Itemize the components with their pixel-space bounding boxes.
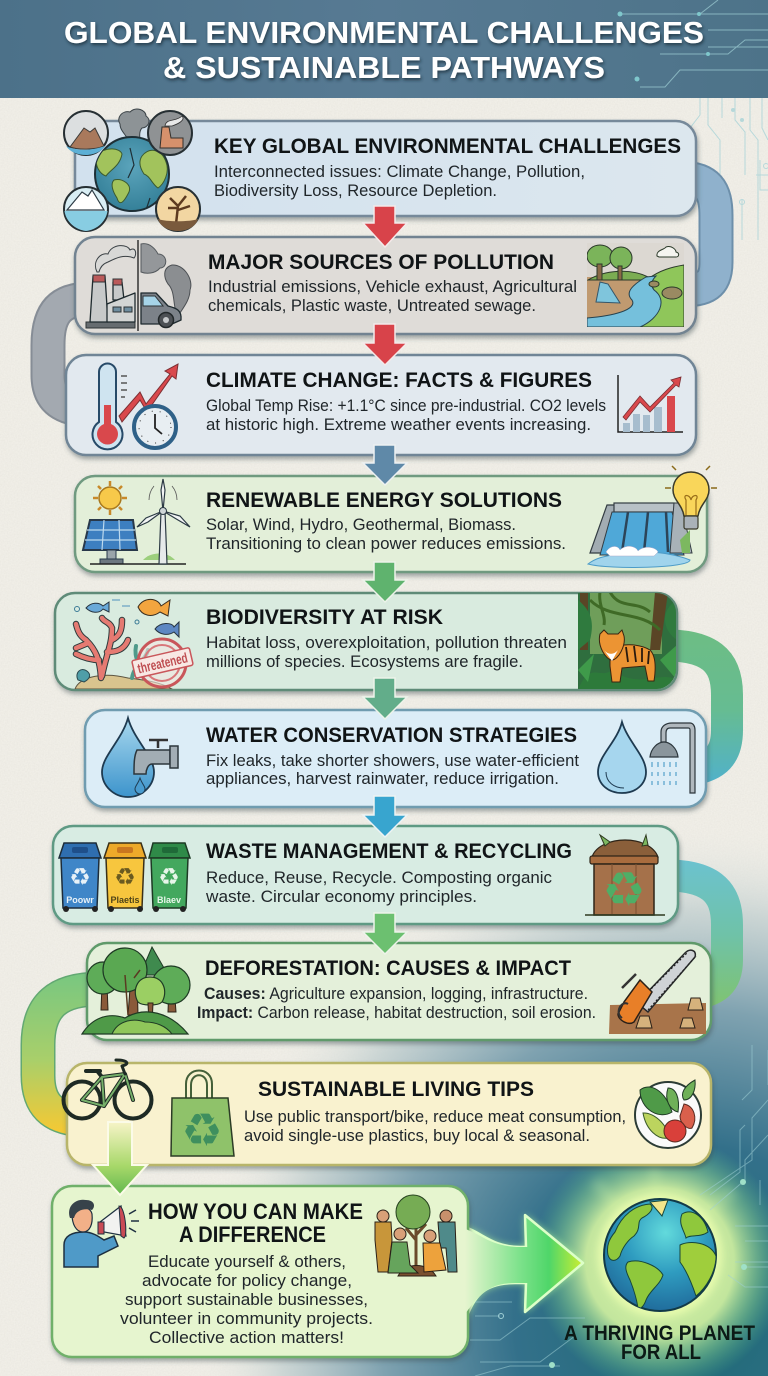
icon: sun, solar panel and wind turbine [83,479,190,564]
body text [206,516,566,553]
body text: chemicals, Plastic waste, Untreated sewage. [208,297,536,315]
heading: CLIMATE CHANGE: FACTS & FIGURES [206,369,592,392]
icon: reusable shopping bag: ♻ [181,1104,223,1156]
body text [214,163,585,200]
icon: coral reef, fish and threatened stamp: threatened [136,649,189,676]
icon: community planting a tree [375,1195,457,1276]
icon: rising bar chart [618,375,683,432]
body text: Collective action matters! [149,1329,344,1347]
icon: thermometer with clock [92,364,178,449]
body text: Educate yourself & others, [148,1253,346,1271]
body text: Causes: Agriculture expansion, logging, infrastructure. [204,985,588,1003]
panel: key global environmental challenges [64,109,696,231]
icon: earth with four threats [64,109,200,231]
connector: teal-green loop from panel 7 to panel 8 [660,875,727,994]
heading: SUSTAINABLE LIVING TIPS [258,1078,534,1101]
closing caption: FOR ALL [621,1341,701,1364]
heading: KEY GLOBAL ENVIRONMENTAL CHALLENGES [214,135,681,158]
heading [148,1199,363,1247]
body text: avoid single-use plastics, buy local & seasonal. [244,1127,590,1145]
connector: gray loop from panel 2 to panel 3 [48,299,90,410]
arrow: red 1 [363,206,407,247]
body text [120,1253,373,1347]
icon: bicycle [64,1060,152,1118]
body text [206,634,567,671]
body text [206,752,579,788]
icon: hydro dam and light bulb [588,466,717,567]
main title: & SUSTAINABLE PATHWAYS [163,50,605,85]
icon: chainsaw and stumps [609,950,706,1034]
heading: WATER CONSERVATION STRATEGIES [206,724,577,747]
panel box [66,355,696,455]
body text [205,869,552,906]
body text: appliances, harvest rainwater, reduce irrigation. [206,770,559,788]
panel: waste management and recycling [53,826,678,924]
heading: MAJOR SOURCES OF POLLUTION [208,251,554,274]
icon: three recycling bins [59,843,190,912]
connector: green-blue loop from panel 5 to panel 6 [660,645,727,770]
body text: Global Temp Rise: +1.1°C since pre-industrial. CO2 levels [206,397,606,415]
panel: biodiversity at risk [55,592,678,690]
panel: water conservation strategies [85,710,706,807]
circuit decoration: lower right [470,1045,768,1376]
body text: waste. Circular economy principles. [205,888,477,906]
panel box [52,1186,468,1357]
arrow: bright green [363,913,407,954]
panel box [67,1063,711,1165]
heading: WASTE MANAGEMENT & RECYCLING [206,840,572,863]
panel box [75,121,696,216]
panel box [85,710,706,807]
body text: Industrial emissions, Vehicle exhaust, Agricultural [208,278,577,296]
body text: Interconnected issues: Climate Change, Pollution, [214,163,585,181]
body text [197,985,596,1022]
connector: green-yellow loop fill [38,989,100,1120]
body text [208,278,577,315]
body text: Habitat loss, overexploitation, pollution threaten [206,634,567,652]
panel: how you can make a difference [52,1186,528,1357]
icon: forest [82,947,190,1034]
body text [244,1108,626,1145]
connector: green-yellow loop from panel 8 to panel 9 [38,989,100,1120]
heading: A DIFFERENCE [179,1222,326,1247]
icon: three recycling bins: Plaetis [110,895,140,905]
arrow: blue [363,796,407,837]
body text: Fix leaks, take shorter showers, use water-efficient [206,752,579,770]
body text: Use public transport/bike, reduce meat consumption, [244,1108,626,1126]
panel box [75,476,707,572]
body text: Impact: Carbon release, habitat destruction, soil erosion. [197,1004,596,1022]
panel: renewable energy solutions [75,466,717,572]
circuit decoration: upper right [690,98,768,240]
body text: at historic high. Extreme weather events increasing. [206,416,591,434]
panel neck to big arrow [462,1228,528,1318]
panel: major sources of pollution [75,237,696,334]
icon: person with megaphone [64,1200,139,1267]
icon: three recycling bins: ♻ [114,864,136,891]
icon: reusable shopping bag [171,1070,234,1156]
body text: Biodiversity Loss, Resource Depletion. [214,182,497,200]
heading: RENEWABLE ENERGY SOLUTIONS [206,489,562,512]
connector: blue loop from panel 1 to panel 2 [680,178,716,290]
icon: three recycling bins: Blaev [157,895,181,905]
icon: salad plate [635,1080,701,1148]
body text: volunteer in community projects. [120,1310,373,1328]
header banner [0,0,768,98]
icon: factory and car smoke [86,240,191,331]
panel box [55,593,677,690]
arrow: green [363,562,407,602]
body text: millions of species. Ecosystems are fragile. [206,653,523,671]
body text: Solar, Wind, Hydro, Geothermal, Biomass. [206,516,516,534]
panel box [87,943,711,1040]
icon: three recycling bins: ♻ [158,864,180,891]
connector: blue loop fill [680,178,716,290]
icon: compost bin [585,835,665,917]
body text: Transitioning to clean power reduces emissions. [206,535,566,553]
panel: climate change facts and figures [66,355,696,455]
icon: water drop and shower [598,722,695,793]
icon: polluted river landscape [587,243,684,327]
panel: deforestation causes and impact [82,943,711,1040]
arrow: slate blue [363,445,407,485]
icon: tiger in the jungle [578,592,678,690]
body text [206,397,606,434]
closing caption [564,1322,755,1364]
panel: sustainable living tips [64,1060,711,1165]
connector: gray loop fill [48,299,90,410]
heading: BIODIVERSITY AT RISK [206,606,443,629]
icon: three recycling bins: ♻ [69,864,91,891]
arrow: red 2 [363,324,407,365]
main title: GLOBAL ENVIRONMENTAL CHALLENGES [64,15,704,50]
body text: advocate for policy change, [142,1272,352,1290]
big arrow to planet [455,1215,583,1320]
body text: Reduce, Reuse, Recycle. Composting organic [206,869,552,887]
icon: compost bin: ♻ [602,864,646,917]
icon: water drop and faucet [102,718,178,797]
arrow: large green arrow from tips to action panel [93,1122,147,1195]
icon: thriving planet earth [598,1193,722,1317]
arrow: sea green [363,678,407,719]
panel box [53,826,678,924]
icon: three recycling bins: Poowr [66,895,94,905]
icon: coral reef, fish and threatened stamp [74,599,193,689]
heading: HOW YOU CAN MAKE [148,1199,363,1224]
panel box [75,237,696,334]
body text: support sustainable businesses, [125,1291,368,1309]
main title [64,15,704,85]
heading: DEFORESTATION: CAUSES & IMPACT [205,957,571,980]
